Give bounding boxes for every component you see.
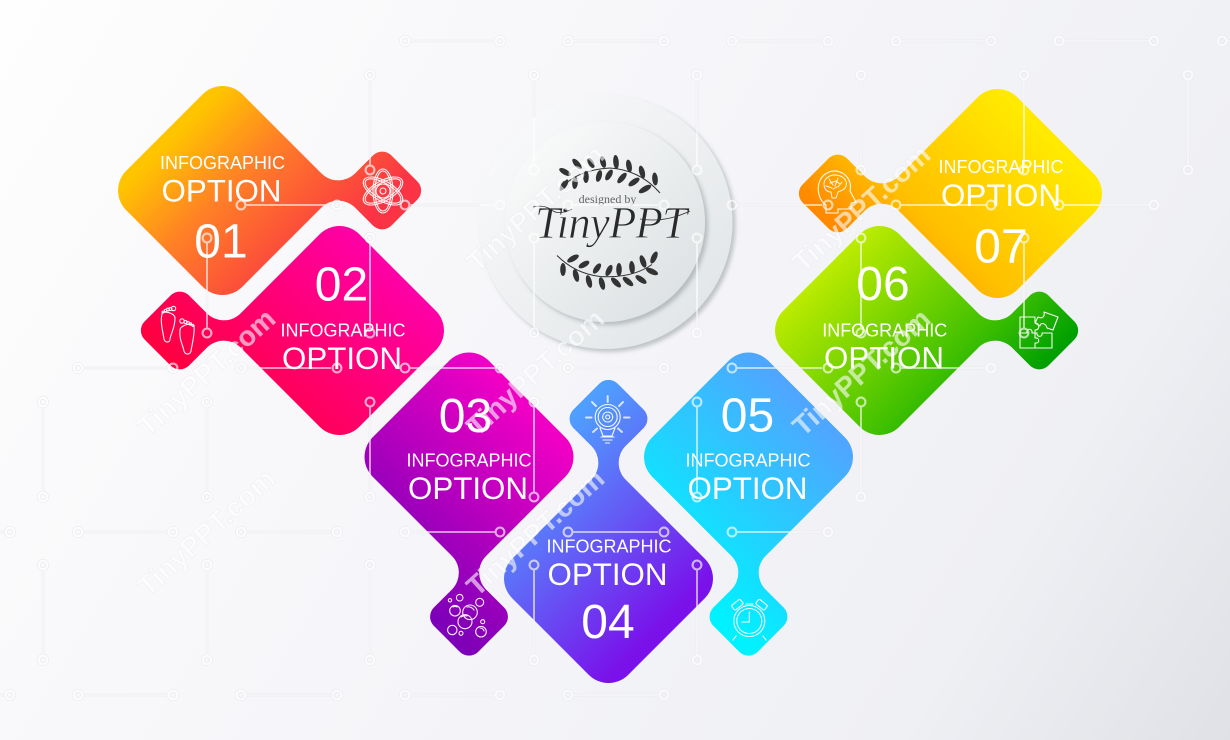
icon: atom: [359, 169, 407, 213]
watermark: TinyPPT.com: [460, 303, 610, 442]
label 02: INFOGRAPHIC: [280, 321, 406, 341]
label 01: [160, 153, 285, 269]
watermark: TinyPPT.com: [786, 303, 936, 442]
label 06: [822, 258, 947, 375]
laurel top: [558, 155, 660, 195]
option 05 shape: [644, 353, 853, 656]
icon: footprints: [161, 306, 194, 354]
option 01 shape: [118, 86, 421, 295]
option 03 shape: [365, 353, 573, 656]
watermark: TinyPPT.com: [460, 139, 610, 278]
label 04: OPTION: [548, 557, 667, 592]
icon: alarm clock: [731, 599, 768, 640]
label 06: INFOGRAPHIC: [822, 321, 947, 341]
label 05: INFOGRAPHIC: [685, 451, 811, 471]
label 07: [938, 157, 1064, 274]
watermark: TinyPPT.com: [131, 463, 281, 602]
option 06 shape: [775, 226, 1078, 435]
option 02 shape: [141, 226, 444, 435]
label 07: OPTION: [941, 178, 1061, 213]
label 01: 01: [194, 216, 248, 269]
label 06: OPTION: [824, 340, 944, 375]
label 04: [546, 537, 672, 649]
watermark: TinyPPT.com: [786, 139, 936, 278]
label 02: [280, 259, 406, 376]
label 03: INFOGRAPHIC: [406, 451, 532, 471]
label 03: [406, 390, 532, 506]
option 04 shape: [504, 380, 713, 683]
laurel bottom: [557, 250, 659, 291]
label 04: 04: [581, 596, 635, 649]
label 01: OPTION: [162, 174, 281, 209]
label 03: 03: [439, 390, 492, 443]
watermark: TinyPPT.com: [131, 303, 281, 442]
label 05: [685, 390, 811, 506]
label 07: 07: [974, 221, 1028, 274]
TinyPPT script: TinyPPT: [535, 198, 690, 248]
label 04: INFOGRAPHIC: [546, 537, 672, 557]
watermark: [131, 139, 936, 602]
central logo badge: [478, 95, 732, 349]
icon: jigsaw puzzle: [1020, 312, 1058, 348]
label 07: INFOGRAPHIC: [938, 157, 1064, 177]
label 02: 02: [315, 259, 368, 312]
watermark: TinyPPT.com: [460, 463, 610, 602]
label 01: INFOGRAPHIC: [160, 153, 285, 173]
icon: light bulb with gear: [586, 396, 630, 443]
option 07 shape: [799, 89, 1102, 298]
icon: head with brain: [818, 171, 856, 213]
designed by: designed by: [579, 192, 636, 206]
inner circle: [505, 122, 705, 322]
label 02: OPTION: [282, 341, 402, 376]
outer circle: [478, 95, 732, 349]
label 05: OPTION: [688, 471, 807, 506]
label 06: 06: [856, 258, 910, 311]
label 03: OPTION: [408, 471, 528, 506]
label 05: 05: [721, 390, 774, 443]
icon: bubbles: [448, 594, 486, 637]
